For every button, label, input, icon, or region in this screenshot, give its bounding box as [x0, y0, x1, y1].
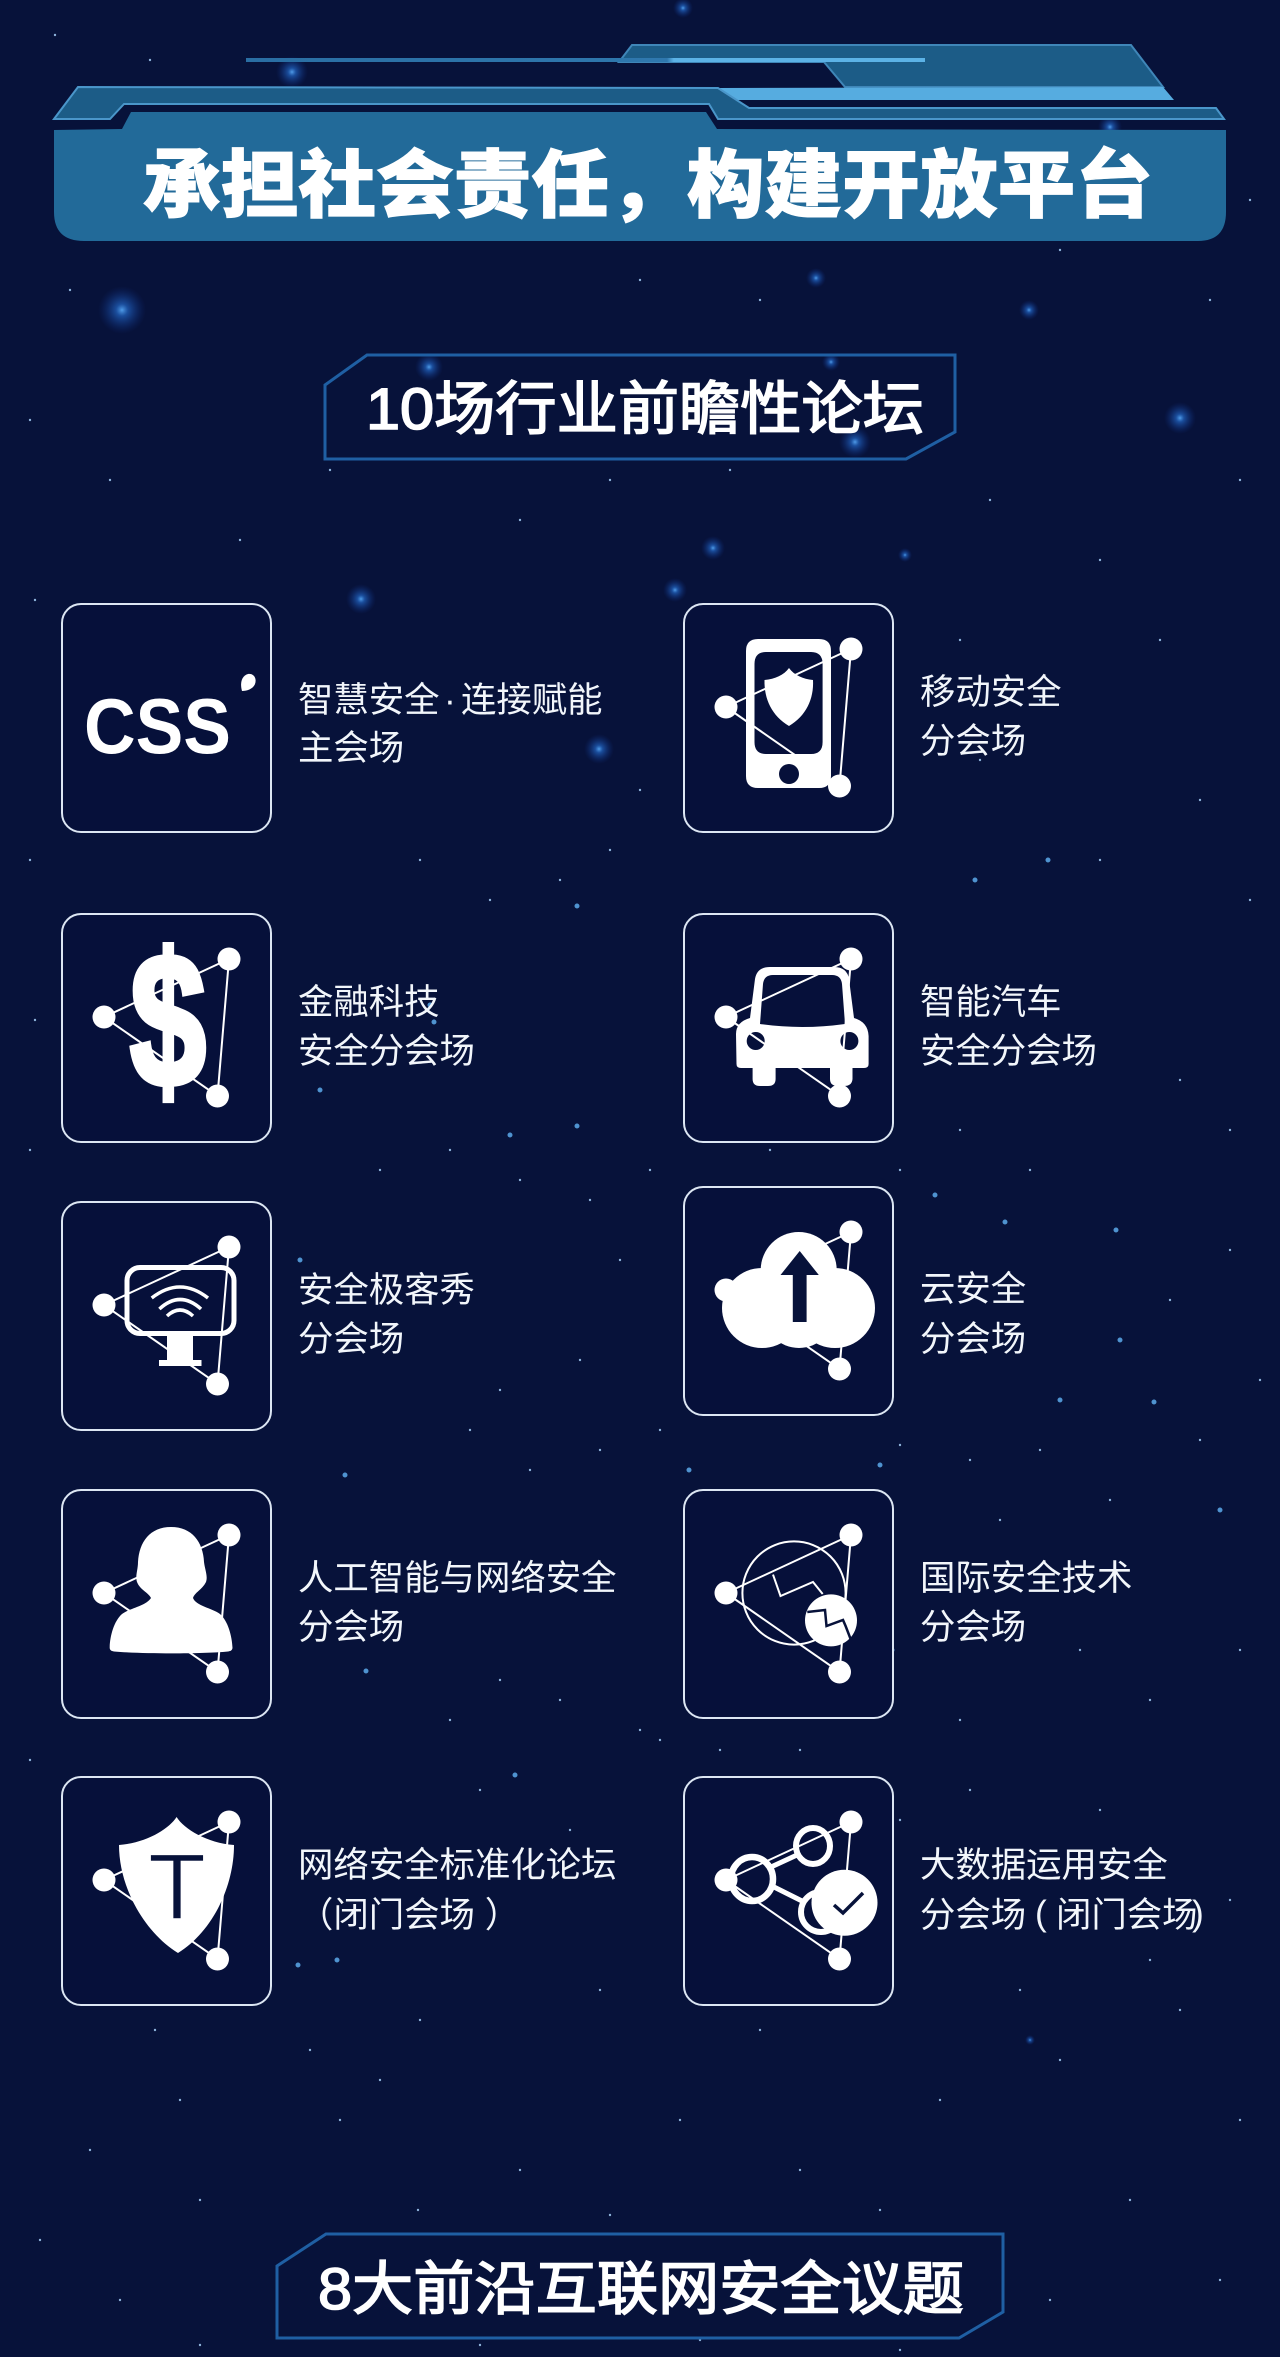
label: 国际安全技术 [920, 1558, 1132, 1598]
light band [718, 87, 1174, 100]
icon: globe [714, 1524, 862, 1684]
label: 大数据运用安全 [920, 1845, 1168, 1885]
card [62, 1202, 271, 1430]
main panel [54, 112, 1226, 241]
icon: person [92, 1524, 240, 1684]
icon: data nodes [714, 1810, 878, 1970]
icon: shield T: T [148, 1834, 206, 1939]
label: 人工智能与网络安全 [298, 1558, 617, 1598]
forum: main venue [62, 604, 603, 832]
label: 分会场 [298, 1607, 404, 1647]
label: 闭门会场 [1056, 1895, 1198, 1935]
label: 智能汽车 [920, 982, 1062, 1022]
label: 主会场 [298, 728, 404, 768]
label: 安全分会场 [920, 1031, 1097, 1071]
label: 智慧安全 [298, 680, 440, 720]
card [62, 914, 271, 1142]
forum: international [684, 1490, 1132, 1718]
icon: CSS logo: CSS [84, 682, 231, 770]
label: 分会场 [920, 1607, 1026, 1647]
icon: cloud [714, 1220, 875, 1380]
label: 网络安全标准化论坛 [298, 1845, 617, 1885]
forum: fintech [62, 914, 475, 1142]
card [684, 1777, 893, 2005]
section heading: topics: 8大前沿互联网安全议题 [318, 2257, 964, 2322]
forum: standards [62, 1777, 617, 2005]
icon: monitor [92, 1236, 240, 1396]
label: 安全分会场 [298, 1031, 475, 1071]
forum: cloud [684, 1187, 1026, 1415]
label: 安全极客秀 [298, 1270, 475, 1310]
forum: mobile [684, 604, 1062, 832]
icon: car [714, 948, 869, 1108]
icon: dollar: $ [130, 915, 206, 1127]
thin bar [246, 58, 925, 62]
card [62, 604, 271, 832]
label: ) [1192, 1893, 1204, 1933]
section heading: forums [325, 355, 955, 459]
card [684, 914, 893, 1142]
card [684, 1490, 893, 1718]
label: 连接赋能 [461, 680, 603, 720]
label: 分会场 [920, 721, 1026, 761]
label: 分会场 [920, 1319, 1026, 1359]
card [62, 1490, 271, 1718]
card [684, 604, 893, 832]
top right plate [619, 45, 1163, 87]
label: 分会场 [920, 1895, 1026, 1935]
left band [54, 87, 1224, 119]
forum: car [684, 914, 1097, 1142]
section heading: forums: 10场行业前瞻性论坛 [366, 377, 924, 442]
title: 承担社会责任，构建开放平台 [143, 144, 1153, 227]
label: ( [1035, 1893, 1047, 1933]
forum: AI [62, 1490, 617, 1718]
label: · [444, 680, 456, 720]
icon: shield T [92, 1810, 240, 1970]
forum: big data [684, 1777, 1204, 2005]
label: 金融科技 [298, 982, 440, 1022]
card [62, 1777, 271, 2005]
header banner [54, 45, 1226, 241]
card [684, 1187, 893, 1415]
forum: geek [62, 1202, 475, 1430]
icon: phone [714, 638, 862, 798]
label: 云安全 [920, 1269, 1026, 1309]
label: 移动安全 [920, 672, 1062, 712]
section heading: topics [277, 2234, 1003, 2338]
label: （闭门会场 ） [298, 1895, 520, 1935]
label: 分会场 [298, 1319, 404, 1359]
